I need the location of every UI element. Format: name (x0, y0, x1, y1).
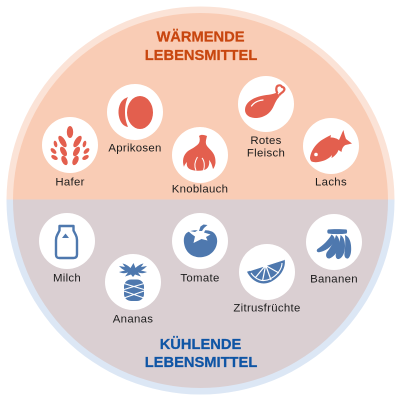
item: Tomate (172, 213, 228, 285)
icon: citrus slice (247, 260, 285, 283)
label: Zitrusfrüchte: Zitrusfrüchte (233, 303, 301, 315)
label: Knoblauch: Knoblauch (172, 184, 228, 196)
label: Milch: Milch (53, 273, 81, 285)
item: Rotes Fleisch (238, 76, 294, 160)
icon: meat leg (245, 85, 284, 118)
heading: warming foods (145, 28, 257, 64)
icon: oat (50, 126, 90, 166)
label: Bananen: Bananen (310, 273, 358, 285)
label: Rotes Fleisch: Fleisch (247, 148, 285, 160)
icon: garlic (183, 135, 216, 171)
heading: cooling foods: LEBENSMITTEL (145, 355, 257, 371)
heading: warming foods: WÄRMENDE (156, 28, 245, 46)
icon: pineapple (119, 263, 147, 301)
item: Zitrusfrüchte (233, 244, 301, 315)
heading: cooling foods (145, 336, 257, 371)
icon: tomato (184, 224, 217, 257)
item: Hafer (42, 117, 98, 189)
icon: bananas (317, 229, 351, 259)
label: Ananas: Ananas (113, 314, 153, 326)
label: Lachs: Lachs (315, 177, 347, 189)
heading: cooling foods: KÜHLENDE (160, 336, 241, 353)
item: Ananas (105, 254, 161, 326)
label: Tomate: Tomate (180, 273, 220, 285)
item: Aprikosen (107, 84, 163, 155)
label: Hafer: Hafer (55, 177, 85, 189)
item: Bananen (306, 214, 362, 285)
label: Rotes Fleisch: Rotes (250, 135, 282, 147)
label: Rotes Fleisch (247, 135, 285, 160)
icon: fish (310, 130, 352, 162)
heading: warming foods: LEBENSMITTEL (145, 48, 257, 64)
item: Knoblauch (172, 127, 228, 196)
item: Milch (39, 213, 95, 285)
panel: warming half circle (6, 6, 394, 200)
icon: apricot (118, 96, 153, 129)
icon: milk bottle (56, 226, 77, 258)
label: Aprikosen: Aprikosen (108, 143, 162, 155)
panel: cooling half circle (6, 200, 394, 394)
item: Lachs (303, 118, 359, 189)
